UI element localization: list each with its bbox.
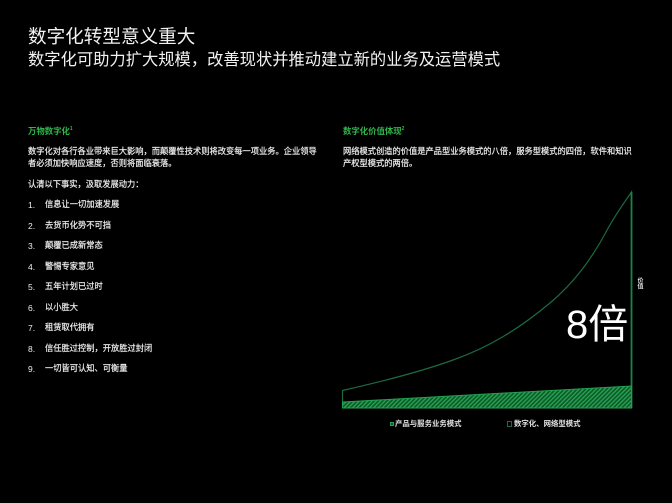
numbered list: 8. <box>28 344 35 354</box>
numbered list: 信息让一切加速发展 <box>45 200 119 209</box>
legend swatch: product model <box>390 422 394 426</box>
numbered list: 五年计划已过时 <box>45 282 103 291</box>
heading: everything digital: 万物数字化1 <box>28 126 73 136</box>
legend label: digital model: 数字化、网络型模式 <box>514 419 581 428</box>
numbered list: 5. <box>28 282 35 292</box>
numbered list: 7. <box>28 323 35 333</box>
subtitle: 数字化可助力扩大规模，改善现状并推动建立新的业务及运营模式 <box>28 51 500 69</box>
text block: digital impact: 者必须加快响应速度，否则将面临衰落。 <box>28 159 176 168</box>
numbered list: 去货币化势不可挡 <box>45 221 111 230</box>
callout: 8x: 8倍 <box>566 303 628 347</box>
axis label: value: 价值 <box>636 277 642 289</box>
legend swatch: digital model <box>507 421 512 427</box>
numbered list: 2. <box>28 221 35 231</box>
text block: value of network models <box>343 146 632 168</box>
digital network model curve <box>342 192 632 408</box>
text block: digital impact <box>28 146 317 168</box>
legend <box>390 419 581 428</box>
numbered list: 9. <box>28 364 35 374</box>
heading: digital value: 数字化价值体现2 <box>343 126 404 136</box>
legend label: product model: 产品与服务业务模式 <box>395 419 462 428</box>
text block: value of network models: 产权型模式的两倍。 <box>343 159 417 168</box>
numbered list: 4. <box>28 262 35 272</box>
numbered list <box>28 199 152 374</box>
numbered list: 信任胜过控制，开放胜过封闭 <box>45 344 152 353</box>
numbered list: 以小胜大 <box>45 303 78 312</box>
numbered list: 租赁取代拥有 <box>45 323 94 332</box>
numbered list: 警惕专家意见 <box>45 262 94 271</box>
text block: value of network models: 网络模式创造的价值是产品型业务模式的八倍，服务型模式的四倍，软件和知识 <box>343 147 632 156</box>
text block: list intro: 认清以下事实，汲取发展动力： <box>28 180 144 189</box>
text block: digital impact: 数字化对各行各业带来巨大影响，而颠覆性技术则将改变每一项业务。企业领导 <box>28 147 317 156</box>
numbered list: 1. <box>28 200 35 210</box>
numbered list: 6. <box>28 303 35 313</box>
numbered list: 3. <box>28 241 35 251</box>
numbered list: 颠覆已成新常态 <box>45 241 103 250</box>
product and service model band <box>342 386 632 408</box>
area chart <box>342 190 632 408</box>
numbered list: 一切皆可认知、可衡量 <box>45 364 128 373</box>
title: 数字化转型意义重大 <box>28 26 195 47</box>
